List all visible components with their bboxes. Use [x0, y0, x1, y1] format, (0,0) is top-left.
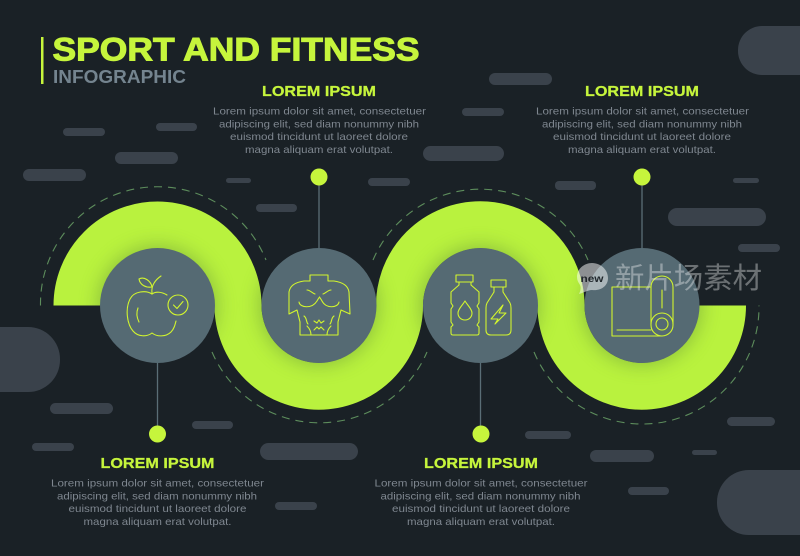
text: step 3: adipiscing elit, sed diam nonummy nibh — [380, 490, 581, 502]
title block — [41, 32, 420, 87]
connector lines — [158, 177, 642, 434]
circle: step 2 — [262, 248, 376, 363]
text: step 4 — [536, 84, 750, 156]
text: step 2: LOREM IPSUM — [262, 84, 376, 100]
text: step 4: LOREM IPSUM — [585, 84, 699, 100]
text: step 2 — [213, 84, 427, 156]
circle: step 4 — [584, 248, 700, 363]
circle: step 1 — [100, 248, 215, 363]
text: step 2: Lorem ipsum dolor sit amet, consectetuer — [213, 106, 427, 118]
dot: step 4 — [634, 168, 650, 186]
circle: step 3 — [423, 248, 538, 363]
text: step 2: adipiscing elit, sed diam nonummy nibh — [219, 118, 419, 130]
text: step 1: adipiscing elit, sed diam nonummy nibh — [57, 490, 257, 502]
dot: step 1 — [149, 426, 166, 442]
text: step 3: Lorem ipsum dolor sit amet, consectetuer — [374, 478, 588, 490]
watermark: new — [580, 273, 604, 285]
dot: step 2 — [310, 168, 328, 186]
text: step 3: magna aliquam erat volutpat. — [407, 516, 555, 528]
text: step 2: euismod tincidunt ut laoreet dolore — [230, 131, 408, 143]
text: step 1: magna aliquam erat volutpat. — [84, 516, 232, 528]
text: step 3 — [374, 456, 588, 528]
text: step 1: LOREM IPSUM — [100, 456, 214, 472]
icon: muscular torso — [289, 275, 350, 335]
dot: step 3 — [472, 426, 490, 442]
text: step 4: euismod tincidunt ut laoreet dolore — [553, 131, 731, 143]
green wave ribbon — [77, 225, 722, 386]
step 2: muscle — [213, 84, 427, 363]
text: step 4: magna aliquam erat volutpat. — [568, 144, 716, 156]
step 1: nutrition — [51, 248, 265, 528]
text: step 4: Lorem ipsum dolor sit amet, consectetuer — [536, 106, 750, 118]
title block: INFOGRAPHIC — [53, 66, 186, 87]
icon: rolled yoga mat — [612, 276, 673, 336]
text: step 3: LOREM IPSUM — [424, 456, 538, 472]
text: step 1: Lorem ipsum dolor sit amet, consectetuer — [51, 478, 265, 490]
step 4: exercise mat — [536, 84, 750, 363]
text: step 2: magna aliquam erat volutpat. — [245, 144, 393, 156]
step 3: hydration — [374, 248, 588, 528]
text: step 1: euismod tincidunt ut laoreet dolore — [68, 503, 247, 515]
watermark: 新片场素材 — [615, 262, 762, 295]
text: step 3: euismod tincidunt ut laoreet dolore — [392, 503, 570, 515]
text: step 1 — [51, 456, 265, 528]
text: step 4: adipiscing elit, sed diam nonummy nibh — [542, 118, 742, 130]
icon: apple with check — [127, 276, 188, 336]
title block: SPORT AND FITNESS — [52, 32, 420, 68]
icon: water and energy bottles — [451, 275, 511, 335]
dashed outline arcs — [40, 187, 759, 424]
